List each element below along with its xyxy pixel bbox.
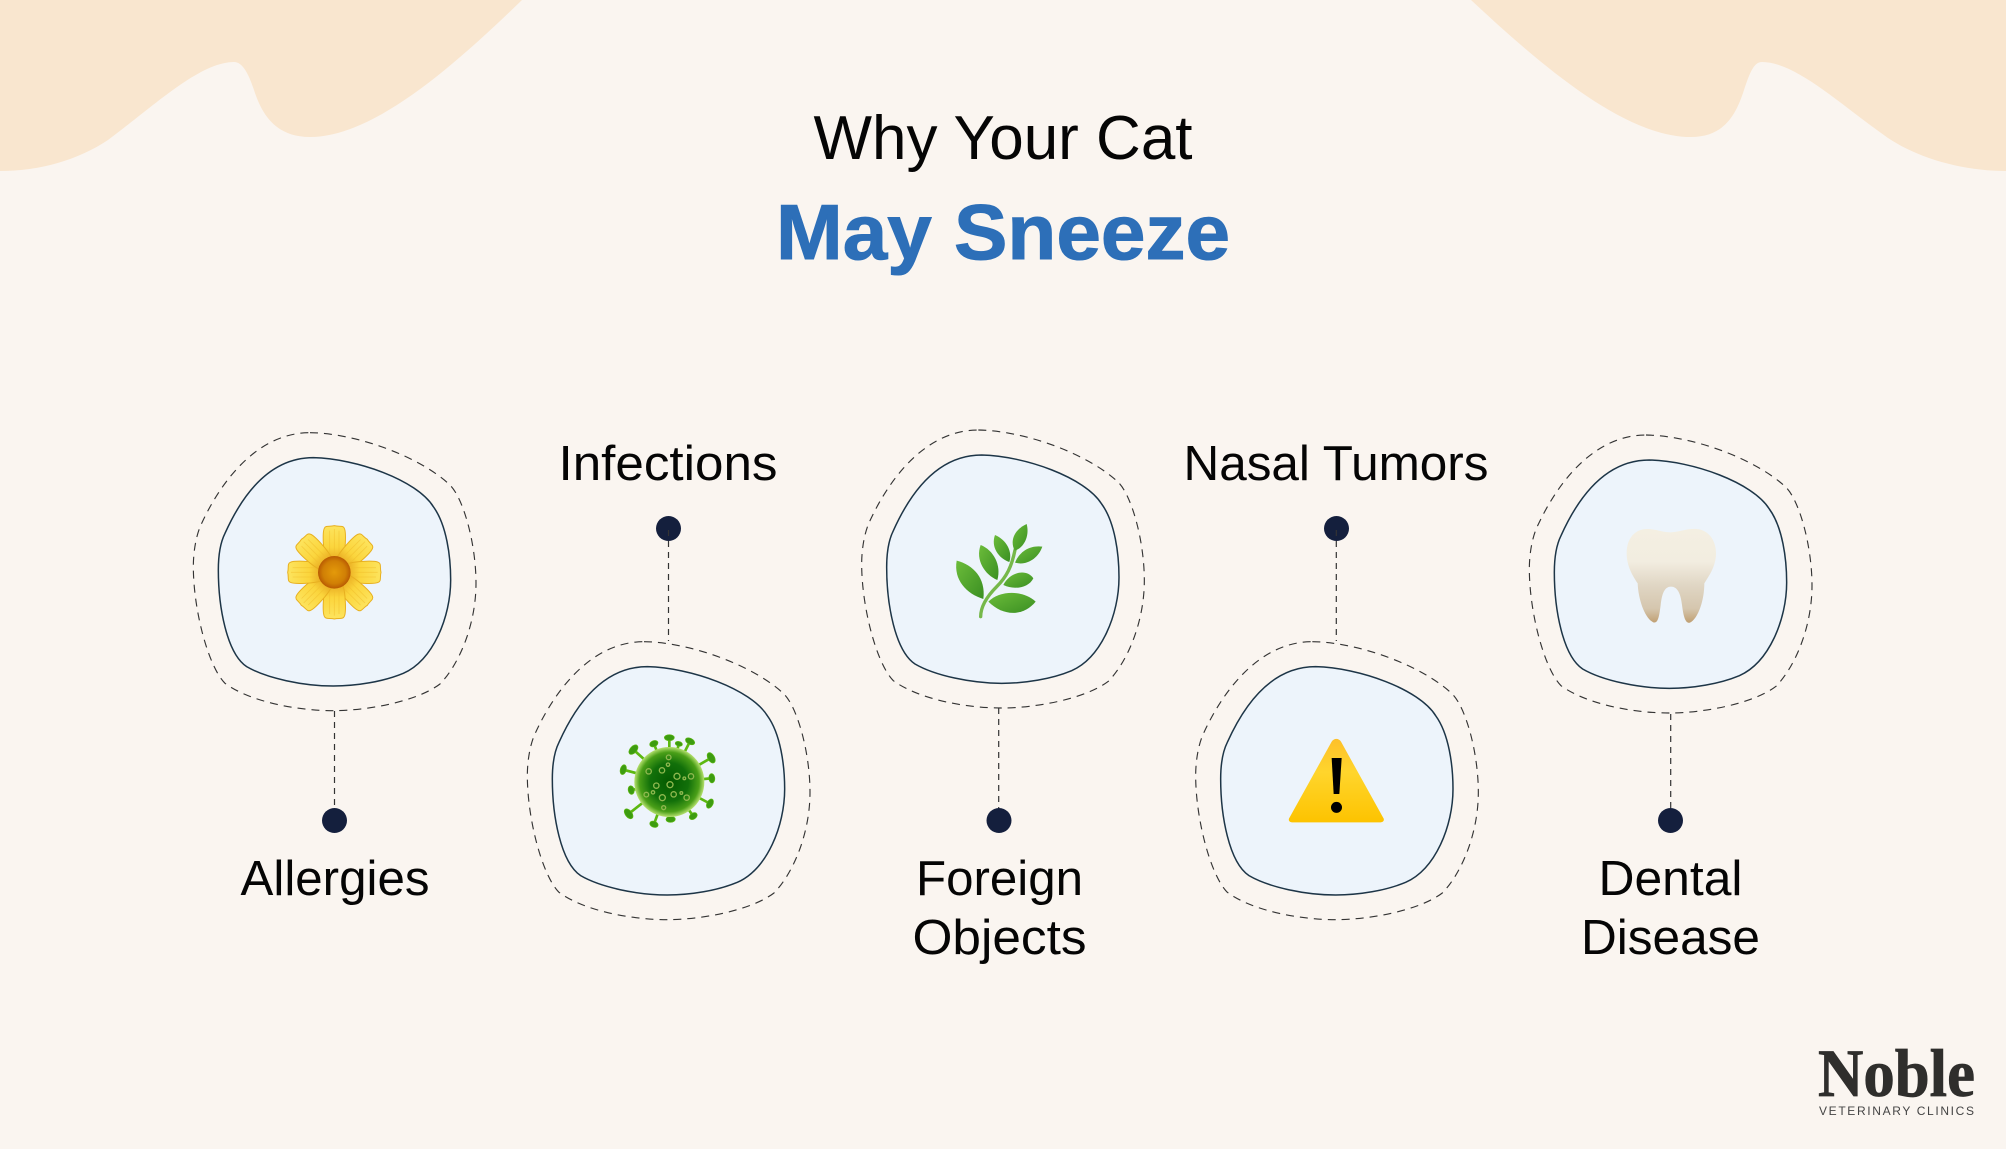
- logo tagline: VETERINARY CLINICS: [1819, 1104, 1974, 1118]
- item: Allergies: [193, 433, 476, 906]
- label: Allergies: [240, 851, 430, 906]
- dot: [656, 516, 681, 541]
- label: Disease: [1581, 910, 1760, 965]
- icon: warning triangle: [1289, 739, 1384, 822]
- dot: [1658, 808, 1683, 833]
- label: Dental: [1598, 851, 1742, 906]
- connector: [1335, 530, 1337, 641]
- decorative wave: top left: [0, 0, 522, 171]
- blob with virus icon: [527, 642, 810, 920]
- icon: flower: [288, 526, 381, 619]
- label: Infections: [558, 436, 778, 491]
- icon: tooth: [1627, 529, 1716, 623]
- blob with warning icon: [1196, 642, 1478, 920]
- title line: May Sneeze: May Sneeze: [776, 188, 1230, 276]
- label: Objects: [912, 910, 1086, 965]
- label: [1581, 851, 1760, 965]
- decorative wave: top right: [1471, 0, 2006, 171]
- connector: [998, 708, 1000, 820]
- icon: leafy sprig: [956, 524, 1042, 617]
- logo: [1818, 1035, 1975, 1118]
- item: Dental Disease: [1529, 435, 1812, 965]
- connector: [668, 530, 670, 641]
- label: [912, 851, 1086, 965]
- label: Nasal Tumors: [1184, 436, 1488, 491]
- label: Foreign: [916, 851, 1083, 906]
- dot: [322, 808, 347, 833]
- logo wordmark: Noble: [1818, 1035, 1975, 1111]
- dot: [986, 808, 1012, 833]
- item: Nasal Tumors: [1184, 436, 1488, 920]
- blob with tooth icon: [1529, 435, 1812, 713]
- title line: Why Your Cat: Why Your Cat: [813, 104, 1193, 173]
- connector: [334, 711, 336, 820]
- title: [776, 104, 1230, 276]
- icon: virus: [619, 735, 717, 829]
- item: Infections: [527, 436, 810, 920]
- item: Foreign Objects: [862, 430, 1144, 965]
- connector: [1670, 714, 1672, 820]
- blob with leaf icon: [862, 430, 1144, 708]
- dot: [1324, 516, 1349, 541]
- blob with flower icon: [193, 433, 476, 711]
